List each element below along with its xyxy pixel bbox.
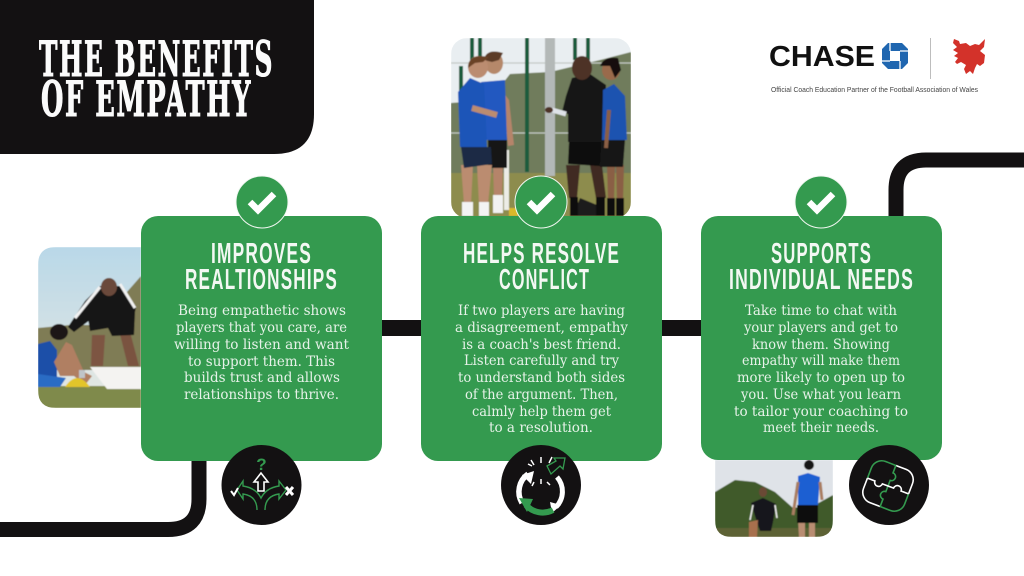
partner strapline: Official Coach Education Partner of the Football Association of Wales bbox=[771, 87, 978, 94]
icon: crossroads decision bbox=[222, 445, 302, 525]
logo: Welsh dragon crest bbox=[953, 39, 985, 74]
second player bbox=[481, 52, 514, 213]
icon: crossroads decision: ? bbox=[256, 455, 267, 474]
heading bbox=[729, 238, 914, 296]
title panel bbox=[0, 0, 314, 154]
body text: meet their needs. bbox=[763, 420, 879, 436]
sponsor logos bbox=[769, 38, 985, 94]
heading bbox=[185, 238, 338, 296]
heading: REALTIONSHIPS bbox=[185, 264, 338, 296]
body text: players that you care, are bbox=[176, 320, 347, 336]
connector: top-right track bbox=[896, 160, 1024, 225]
body text: more likely to open up to bbox=[737, 370, 905, 386]
title: OF EMPATHY bbox=[41, 70, 252, 128]
body text: Take time to chat with bbox=[745, 303, 897, 319]
body text: Listen carefully and try bbox=[464, 353, 619, 369]
check badge bbox=[795, 176, 847, 228]
title bbox=[39, 30, 274, 128]
body text: willing to listen and want bbox=[174, 337, 349, 353]
icon: conflict resolution cycle bbox=[501, 445, 581, 525]
photo: coach talking with players bbox=[451, 38, 631, 218]
heading: HELPS RESOLVE bbox=[463, 238, 620, 270]
check badge bbox=[236, 176, 288, 228]
body text: to understand both sides bbox=[458, 370, 625, 386]
body text: is a coach's best friend. bbox=[462, 337, 621, 353]
body text: to a resolution. bbox=[489, 420, 593, 436]
heading: CONFLICT bbox=[499, 264, 590, 296]
heading: SUPPORTS bbox=[771, 238, 872, 270]
body text: Being empathetic shows bbox=[178, 303, 346, 319]
body text: empathy will make them bbox=[742, 353, 900, 369]
body text: know them. Showing bbox=[752, 337, 890, 353]
heading: IMPROVES bbox=[211, 238, 312, 270]
body text: a disagreement, empathy bbox=[455, 320, 628, 336]
heading bbox=[463, 238, 620, 296]
photo: coach with seated player bbox=[38, 247, 141, 408]
body text: to tailor your coaching to bbox=[734, 404, 908, 420]
divider bbox=[930, 38, 931, 79]
title: THE BENEFITS bbox=[39, 30, 274, 88]
body text bbox=[734, 303, 908, 436]
body text: builds trust and allows bbox=[184, 370, 340, 386]
check badge bbox=[515, 176, 567, 228]
coach bbox=[545, 56, 606, 216]
logo: Chase octagon bbox=[882, 43, 908, 69]
body text bbox=[455, 303, 628, 436]
body text: relationships to thrive. bbox=[184, 387, 339, 403]
connector: card 2 to card 3 bbox=[660, 320, 704, 336]
right player bbox=[600, 58, 627, 216]
body text: your players and get to bbox=[743, 320, 898, 336]
body text: to support them. This bbox=[188, 354, 335, 370]
front left player bbox=[458, 56, 497, 216]
connector: bottom-left track bbox=[0, 455, 199, 530]
card 1: improves relationships bbox=[141, 176, 382, 461]
body text: of the argument. Then, bbox=[465, 387, 618, 403]
card 3: supports individual needs bbox=[701, 176, 942, 460]
photo: coach and player on the field bbox=[715, 460, 833, 537]
card 2: helps resolve conflict bbox=[421, 176, 662, 461]
body text: calmly help them get bbox=[472, 404, 611, 420]
connector: card 1 to card 2 bbox=[380, 320, 424, 336]
icon: jigsaw puzzle bbox=[849, 445, 929, 525]
logo: Chase wordmark: CHASE bbox=[769, 41, 875, 73]
body text: you. Use what you learn bbox=[740, 387, 901, 403]
body text bbox=[174, 303, 349, 403]
body text: If two players are having bbox=[458, 303, 625, 319]
